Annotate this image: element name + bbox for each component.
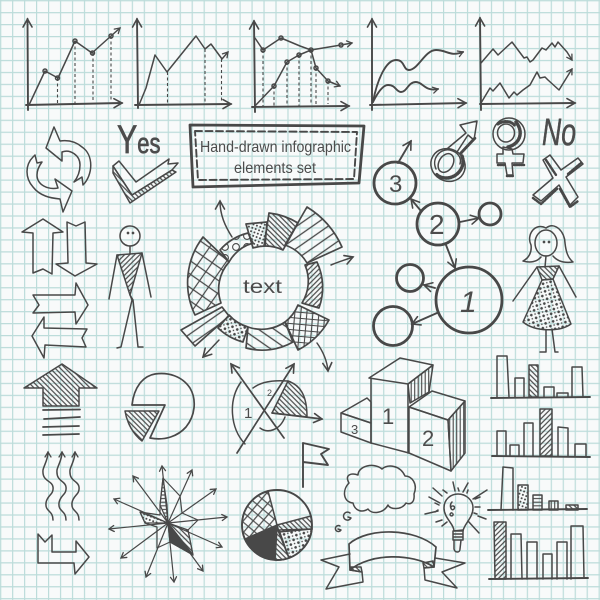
arrow: 3 outward (398, 141, 411, 163)
line chart 2 (135, 19, 231, 108)
arrow: ring top-left (220, 201, 232, 237)
title line 2: elements set (234, 160, 316, 177)
bar chart C (488, 467, 587, 510)
label: 2: 2 (267, 388, 272, 398)
diagram: numbered circles network (374, 141, 502, 346)
arrow: big hatched up arrow (24, 364, 97, 435)
arrow: ring bottom-left (203, 340, 219, 357)
icon: light bulb (425, 482, 487, 552)
speech cloud (335, 465, 415, 532)
label: 1: 1 (244, 405, 252, 422)
circle 2 (417, 203, 459, 245)
line chart 5 (480, 18, 575, 110)
bar chart A (491, 356, 590, 398)
bar chart B (492, 409, 590, 457)
heading: Yes: Yes (117, 117, 161, 162)
arrow: ring bottom-right (317, 343, 328, 371)
chart: sketched pie (242, 490, 312, 560)
circle 1 (436, 267, 502, 333)
icon: recycle arrows (27, 127, 91, 212)
arrow: bent right arrow (38, 534, 89, 574)
chart: segmented ring with text (181, 207, 342, 350)
circle 1: 1 (460, 286, 477, 319)
circle 3: 3 (389, 171, 402, 198)
podium 3: 3 (351, 422, 358, 437)
arrow: ring right (331, 257, 353, 265)
chart: pie with detached slice (125, 374, 194, 441)
arrow: right outline (33, 283, 88, 324)
icon: male symbol (425, 121, 477, 188)
circle lower left (374, 306, 412, 346)
line chart 1 (26, 19, 122, 110)
bar chart D (489, 522, 588, 579)
podium 1: 1 (382, 404, 394, 429)
line chart 4 (370, 19, 466, 110)
arrow: 1 to upper circle (424, 285, 435, 288)
circle 3 (374, 162, 416, 204)
arrow: 2 to 1 (446, 245, 455, 268)
arrow: down outline (56, 222, 97, 276)
small circle right (479, 203, 501, 225)
chart: star of arrows (109, 466, 227, 582)
title line 1: Hand-drawn infographic (200, 139, 351, 156)
figure: stick man (109, 226, 151, 348)
arrow: up outline (22, 219, 63, 274)
line chart 3 (252, 21, 352, 112)
podium 2: 2 (422, 426, 434, 451)
figure: girl in dress (513, 226, 576, 352)
small circle upper left (396, 264, 424, 292)
heading: No: No (542, 112, 576, 154)
ribbon banner (321, 532, 465, 589)
arrow: left outline (32, 317, 87, 358)
arrows: three wavy up arrows (43, 452, 79, 520)
icon: flag (303, 443, 329, 487)
center label: text (243, 277, 283, 298)
icon: check mark (113, 159, 178, 203)
arrow: 1 to lower circle (412, 313, 437, 324)
title box (190, 125, 364, 187)
arrow: 2 to small circle (460, 218, 479, 222)
chart: podium (341, 358, 465, 471)
icon: female symbol (493, 118, 525, 176)
circle 2: 2 (429, 209, 445, 240)
arrow: 2 to 3 (411, 199, 421, 211)
icon: cross (533, 155, 583, 207)
chart: angle diagram (231, 364, 322, 453)
